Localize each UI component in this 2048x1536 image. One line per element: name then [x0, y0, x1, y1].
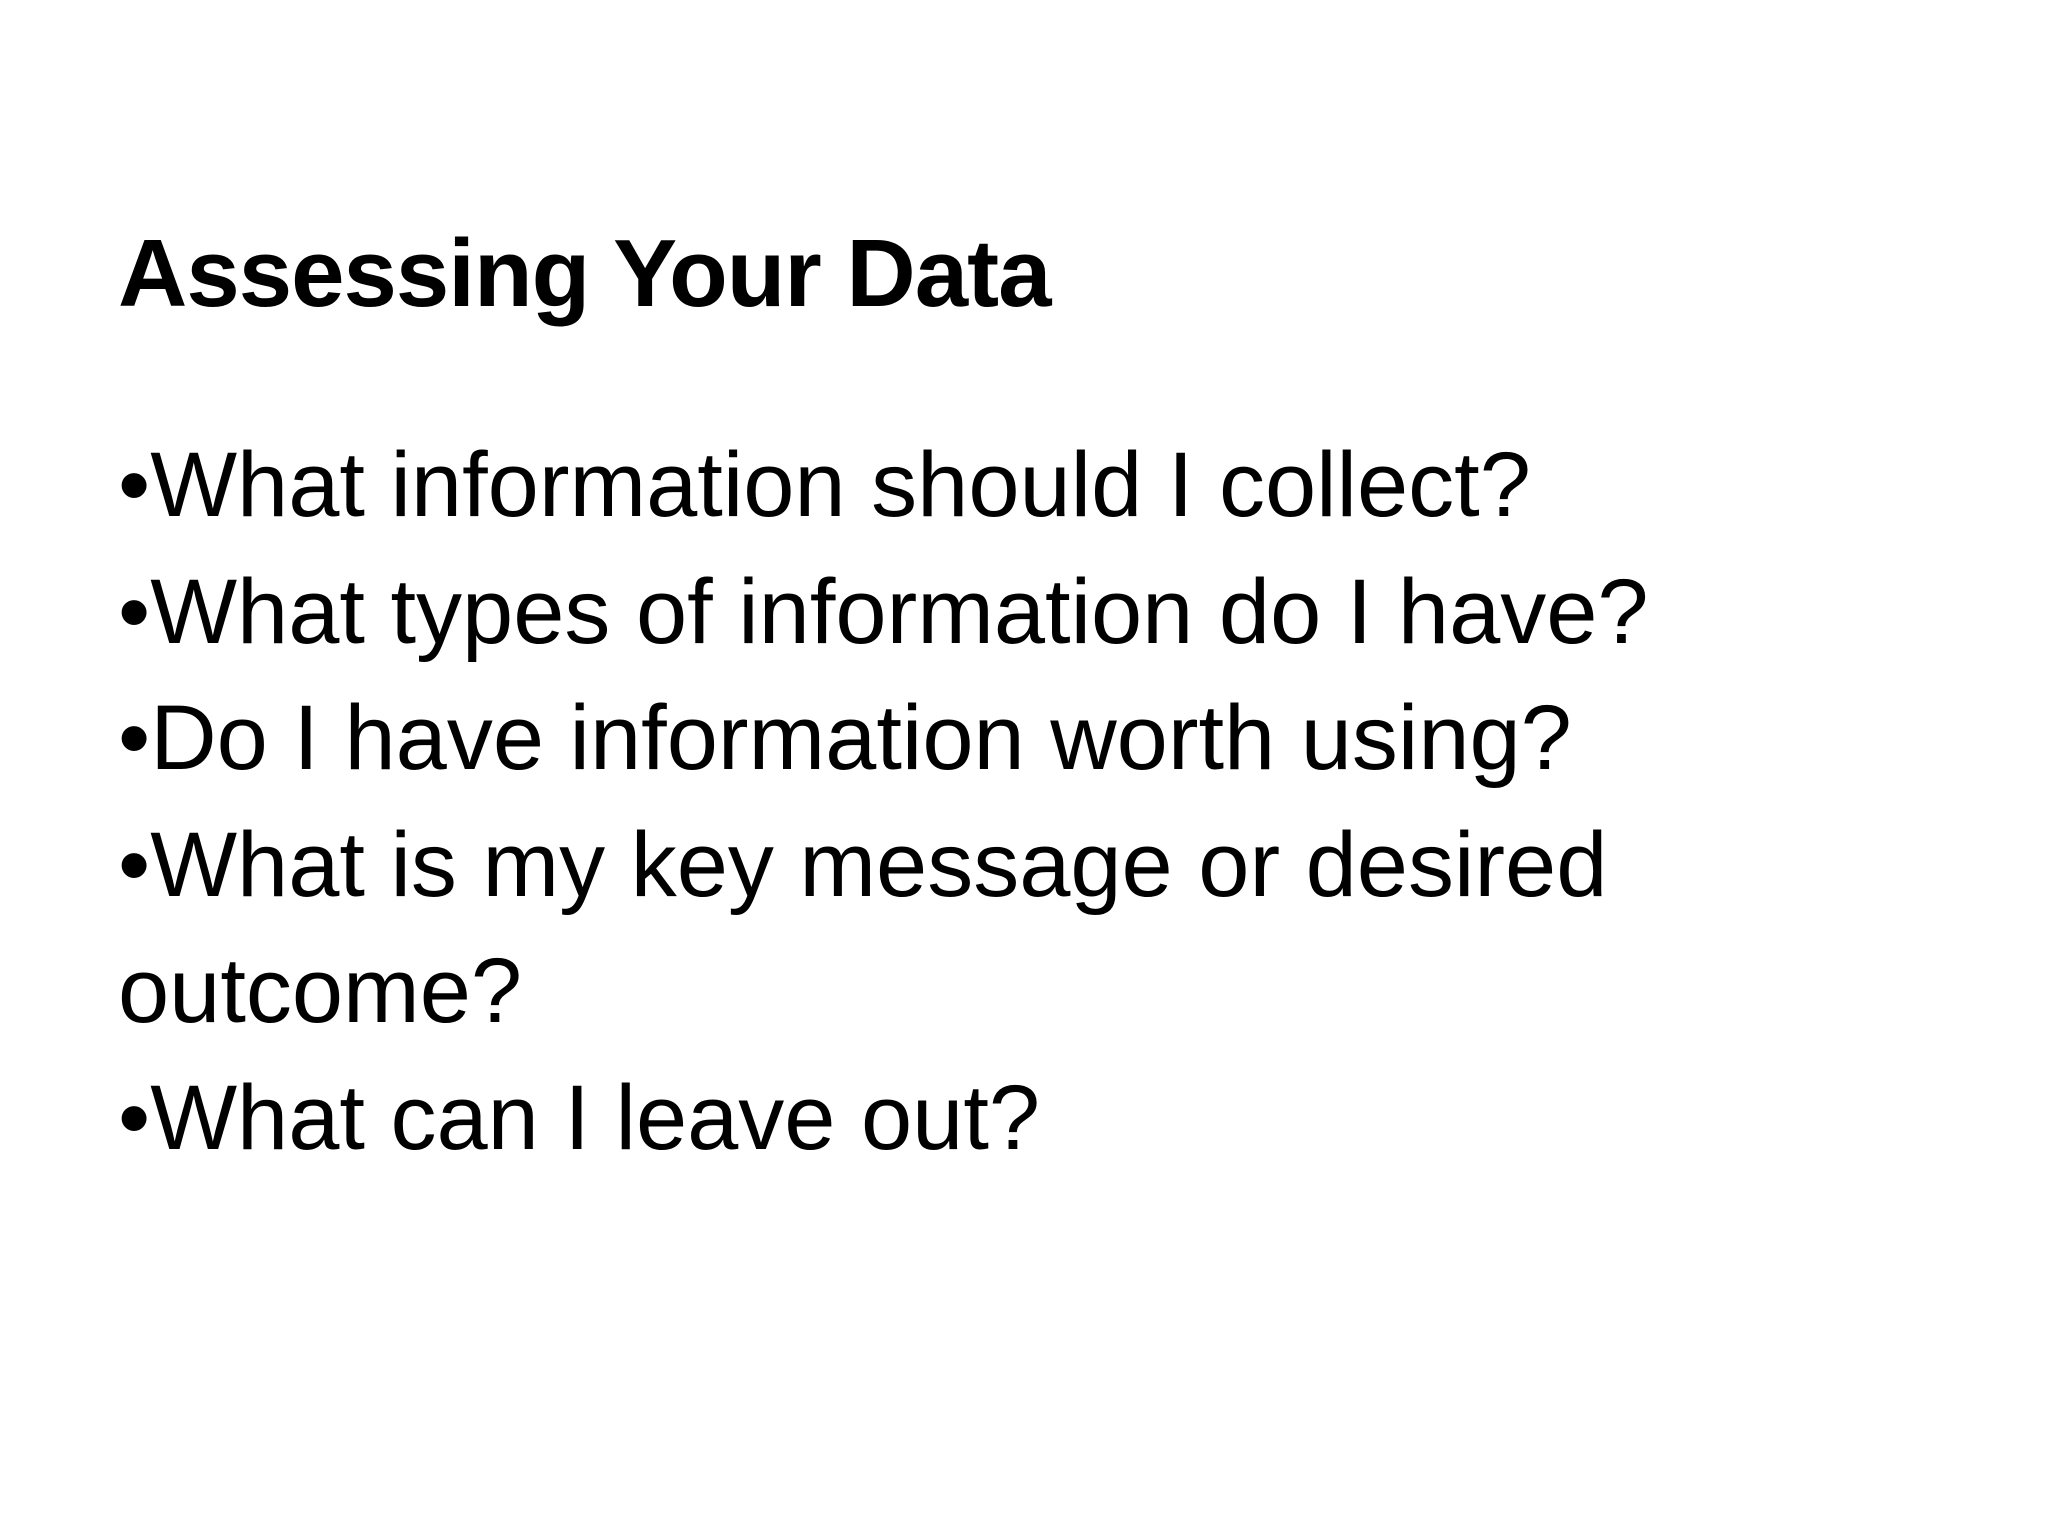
title: Assessing Your Data [118, 220, 1050, 327]
bullet 1: •What information should I collect? [118, 434, 1531, 536]
bullet 4: •What is my key message or desired [118, 814, 1607, 916]
bullet 4: outcome? [118, 940, 522, 1042]
bullet 3: •Do I have information worth using? [118, 687, 1572, 789]
bullet 4 [118, 814, 1607, 1042]
bullet 5: •What can I leave out? [118, 1067, 1040, 1169]
text block: bullet questions [118, 434, 1649, 1169]
bullet 2: •What types of information do I have? [118, 561, 1649, 663]
